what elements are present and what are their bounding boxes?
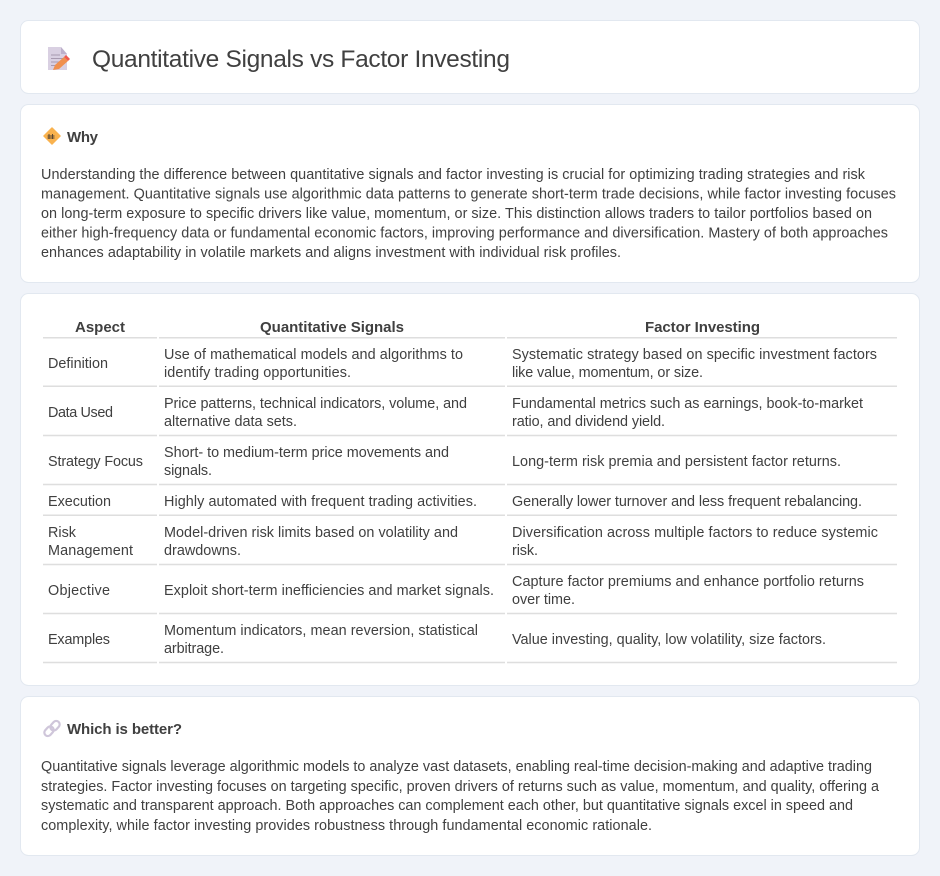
icon: link [43,720,61,737]
row: data used: alternative data sets. [164,414,297,430]
panel: which is better [20,696,920,856]
text block: why paragraph: either high-frequency data or fundamental economic factors, improving performance and diversification. Mastery of both approaches [41,226,888,242]
row: objective: Capture factor premiums and enhance portfolio returns [512,574,864,590]
row: strategy focus: Long-term risk premia and persistent factor returns. [512,454,841,470]
text block: why paragraph: enhances adaptability in volatile markets and aligns investment with individual risk profiles. [41,245,621,261]
row: execution: Generally lower turnover and less frequent rebalancing. [512,494,862,510]
row: examples [48,623,826,657]
table header row [75,319,760,336]
row: risk management: risk. [512,543,538,559]
row: data used: ratio, and dividend yield. [512,414,665,430]
row: definition: Definition [48,356,108,372]
text block: why paragraph [41,167,896,261]
row: risk management: Risk [48,525,77,541]
text block: which paragraph: Quantitative signals leverage algorithmic models to analyze vast datasets, enabling real-time decision-making and adaptive trading [41,759,872,775]
row: objective: Objective [48,583,110,599]
row: strategy focus [48,445,841,479]
panel: comparison table [20,294,920,686]
table header row: Aspect [75,319,125,336]
row: risk management: Diversification across multiple factors to reduce systemic [512,525,878,541]
row: execution [48,494,862,510]
row: risk management: Model-driven risk limits based on volatility and [164,525,458,541]
row: data used: Fundamental metrics such as earnings, book-to-market [512,396,863,412]
row: definition: Systematic strategy based on specific investment factors [512,347,877,363]
row: execution: Highly automated with frequent trading activities. [164,494,477,510]
row: strategy focus: Short- to medium-term price movements and [164,445,449,461]
text block: which paragraph: systematic and transparent approach. Both approaches can complement each other, but quantitative signals excel in speed and [41,798,853,814]
row: data used [48,396,863,430]
row: risk management [48,525,878,559]
row: data used: Price patterns, technical indicators, volume, and [164,396,467,412]
row: objective: Exploit short-term inefficiencies and market signals. [164,583,494,599]
row: examples: Examples [48,632,110,648]
heading: why: Why [67,129,99,146]
panel: why [20,104,920,282]
row: data used: Data Used [48,405,113,421]
row: examples: Momentum indicators, mean reversion, statistical [164,623,478,639]
text block: which paragraph: strategies. Factor investing focuses on targeting specific, proven drivers of returns such as value, momentum, and quality, offering a [41,779,879,795]
row: execution: Execution [48,494,111,510]
row: definition [48,347,877,381]
table header row: Quantitative Signals [260,319,404,336]
title: Quantitative Signals vs Factor Investing [92,46,510,73]
text block: why paragraph: on long-term exposure to specific drivers like value, momentum, or size. This distinction allows traders to tailor portfolios based on [41,206,872,222]
text block: why paragraph: management. Quantitative signals use algorithmic data patterns to generate short-term trade decisions, while factor investing focuses [41,186,896,202]
row: strategy focus: signals. [164,463,212,479]
row: risk management: drawdowns. [164,543,241,559]
row: definition: like value, momentum, or size. [512,365,703,381]
row: strategy focus: Strategy Focus [48,454,143,470]
icon: document with pencil [48,47,70,70]
row: definition: identify trading opportunities. [164,365,351,381]
text block: which paragraph [41,759,879,834]
table header row: Factor Investing [645,319,760,336]
row: definition: Use of mathematical models and algorithms to [164,347,463,363]
icon: warning diamond [44,128,60,144]
row: objective [48,574,864,608]
panel: header [20,20,920,94]
row: examples: arbitrage. [164,641,224,657]
text block: which paragraph: complexity, while factor investing provides robustness through fundamental economic rationale. [41,818,652,834]
row: risk management: Management [48,543,133,559]
row: examples: Value investing, quality, low volatility, size factors. [512,632,826,648]
text block: why paragraph: Understanding the difference between quantitative signals and factor investing is crucial for optimizing trading strategies and risk [41,167,866,183]
heading: which is better: Which is better? [67,721,182,738]
row: objective: over time. [512,592,575,608]
